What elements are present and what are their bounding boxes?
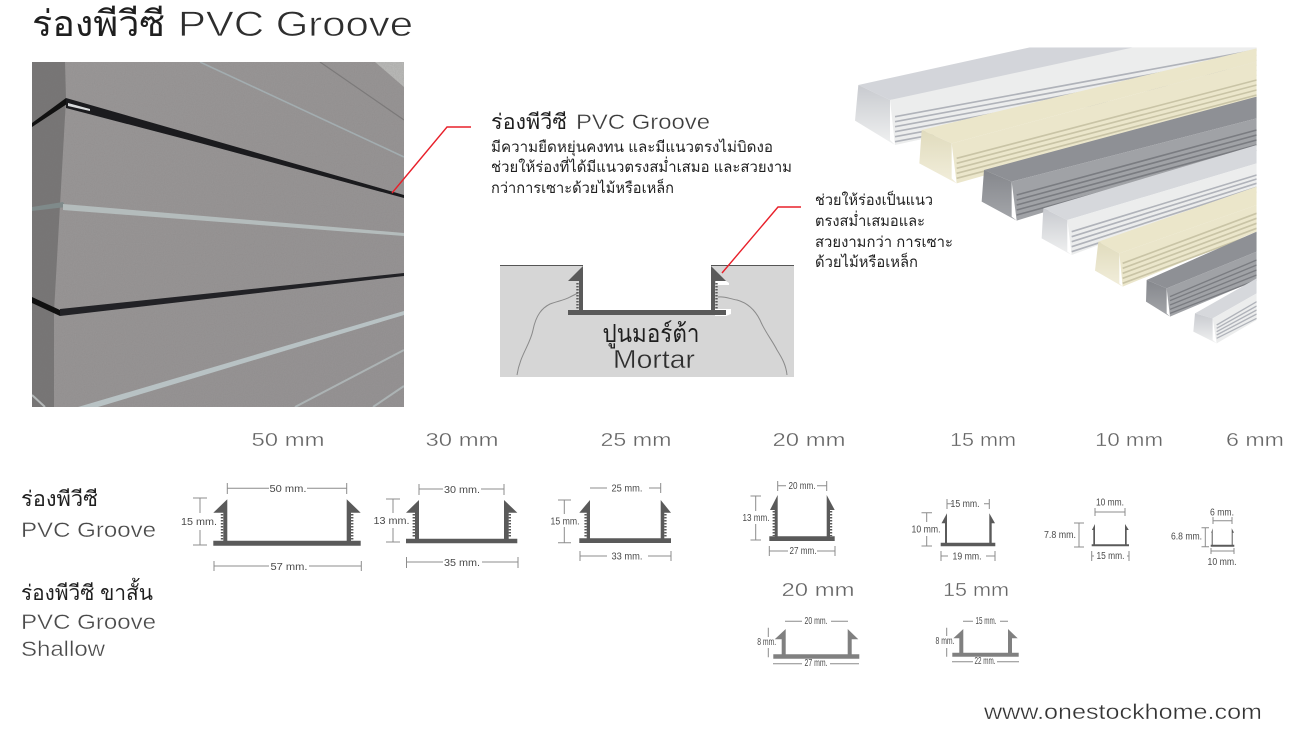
profile drawing: 15 mm: 15 mm. bbox=[950, 499, 980, 510]
text block: groove benefit note: ช่วยให้ร่องเป็นแนว bbox=[815, 190, 933, 209]
text block: groove benefit note: ตรงสม่ำเสมอและ bbox=[815, 210, 925, 230]
arrow: red leader to wall groove bbox=[392, 127, 471, 193]
row label: PVC Groove Shallow: ร่องพีวีซี ขาสั้น bbox=[21, 578, 153, 605]
profile drawing: 15 mm: 19 mm. bbox=[952, 552, 982, 562]
size heading: shallow 20 mm: 20 mm bbox=[782, 580, 854, 600]
profile drawing: 25 mm bbox=[550, 483, 671, 562]
profile drawing: 20 mm bbox=[742, 481, 835, 557]
profile drawing: 10 mm bbox=[1044, 498, 1129, 562]
profile drawing: shallow 15 mm: 22 mm. bbox=[974, 656, 996, 667]
profile drawing: shallow 20 mm: 8 mm. bbox=[757, 637, 776, 648]
profile drawing: 25 mm: 33 mm. bbox=[612, 552, 642, 562]
profile drawing: shallow 15 mm: 8 mm. bbox=[936, 636, 954, 647]
row label: PVC Groove Shallow: PVC Groove bbox=[21, 611, 156, 634]
diagram: groove cross-section in mortar bbox=[500, 264, 794, 377]
row label: PVC Groove Shallow: Shallow bbox=[21, 638, 106, 661]
mortar label: Mortar bbox=[613, 344, 695, 374]
profile drawing: 30 mm bbox=[374, 484, 518, 569]
website url: www.onestockhome.com bbox=[983, 701, 1262, 724]
profile drawing: 50 mm: 57 mm. bbox=[270, 562, 308, 573]
profile drawing: shallow 15 mm: 15 mm. bbox=[976, 616, 996, 627]
profile drawing: 25 mm: 15 mm. bbox=[550, 516, 580, 528]
size heading: 6 mm: 6 mm bbox=[1226, 430, 1284, 450]
profile drawing: 15 mm: 10 mm. bbox=[912, 524, 940, 536]
row label: PVC Groove: PVC Groove bbox=[21, 519, 156, 542]
profile drawing: 30 mm: 30 mm. bbox=[444, 485, 480, 496]
mortar label: ปูนมอร์ต้า bbox=[602, 320, 700, 349]
profile drawing: 10 mm: 10 mm. bbox=[1096, 498, 1124, 508]
text block: groove benefit note: สวยงามกว่า การเซาะ bbox=[815, 234, 953, 251]
text block: groove benefit note bbox=[815, 190, 953, 271]
size heading: 10 mm: 10 mm bbox=[1095, 430, 1163, 450]
size heading: 25 mm: 25 mm bbox=[600, 430, 672, 450]
profile drawing: shallow 20 mm: 20 mm. bbox=[804, 616, 828, 627]
row label: PVC Groove bbox=[21, 488, 156, 542]
text block: PVC Groove description: ร่องพีวีซี bbox=[491, 111, 567, 134]
profile drawing: 50 mm: 15 mm. bbox=[181, 517, 217, 528]
size heading: 50 mm: 50 mm bbox=[252, 430, 324, 450]
size heading: 15 mm: 15 mm bbox=[950, 430, 1016, 450]
row label: PVC Groove Shallow bbox=[21, 578, 156, 661]
size heading: shallow 15 mm: 15 mm bbox=[943, 580, 1009, 600]
profile drawing: 6 mm: 10 mm. bbox=[1208, 557, 1236, 568]
profile drawing: 20 mm: 20 mm. bbox=[788, 481, 816, 492]
profile drawing: 10 mm: 7.8 mm. bbox=[1044, 530, 1076, 541]
text block: PVC Groove description: PVC Groove bbox=[576, 111, 710, 134]
profile drawing: 25 mm: 25 mm. bbox=[612, 484, 642, 494]
profile drawing: 30 mm: 35 mm. bbox=[444, 558, 480, 569]
size heading: 20 mm: 20 mm bbox=[772, 430, 846, 450]
profile drawing: 6 mm: 6 mm. bbox=[1210, 508, 1234, 518]
title bbox=[32, 3, 413, 44]
profile drawing: 50 mm: 50 mm. bbox=[270, 484, 306, 495]
title: ร่องพีวีซี bbox=[32, 3, 165, 44]
profile drawing: 50 mm bbox=[181, 483, 361, 573]
photo: plastered wall with PVC grooves bbox=[32, 62, 404, 407]
profile drawing: 30 mm: 13 mm. bbox=[374, 516, 410, 527]
profile drawing: 20 mm: 13 mm. bbox=[742, 513, 770, 524]
profile drawing: 15 mm bbox=[912, 499, 995, 562]
profile drawing: 6 mm bbox=[1171, 508, 1236, 568]
profile drawing: 6 mm: 6.8 mm. bbox=[1171, 532, 1202, 542]
mortar label bbox=[602, 320, 700, 374]
text block: PVC Groove description: กว่าการเซาะด้วยไม้หรือเหล็ก bbox=[491, 178, 674, 197]
image: coloured PVC groove profiles bbox=[855, 47, 1257, 343]
text block: PVC Groove description: มีความยืดหยุ่นคงทน และมีแนวตรงไม่บิดงอ bbox=[491, 138, 773, 157]
title: PVC Groove bbox=[178, 5, 413, 44]
arrow: red leader to groove flange bbox=[722, 207, 801, 273]
row label: PVC Groove: ร่องพีวีซี bbox=[21, 488, 98, 511]
profile drawing: shallow 15 mm bbox=[936, 616, 1019, 667]
text block: PVC Groove description bbox=[491, 111, 792, 197]
text block: PVC Groove description: ช่วยให้ร่องที่ได้มีแนวตรงสม่ำเสมอ และสวยงาม bbox=[491, 156, 792, 176]
profile drawing: 20 mm: 27 mm. bbox=[790, 546, 816, 557]
text block: groove benefit note: ด้วยไม้หรือเหล็ก bbox=[815, 252, 918, 271]
size heading: 30 mm: 30 mm bbox=[426, 430, 498, 450]
profile drawing: shallow 20 mm: 27 mm. bbox=[804, 658, 828, 669]
profile drawing: shallow 20 mm bbox=[757, 616, 859, 669]
profile drawing: 10 mm: 15 mm. bbox=[1096, 551, 1124, 562]
